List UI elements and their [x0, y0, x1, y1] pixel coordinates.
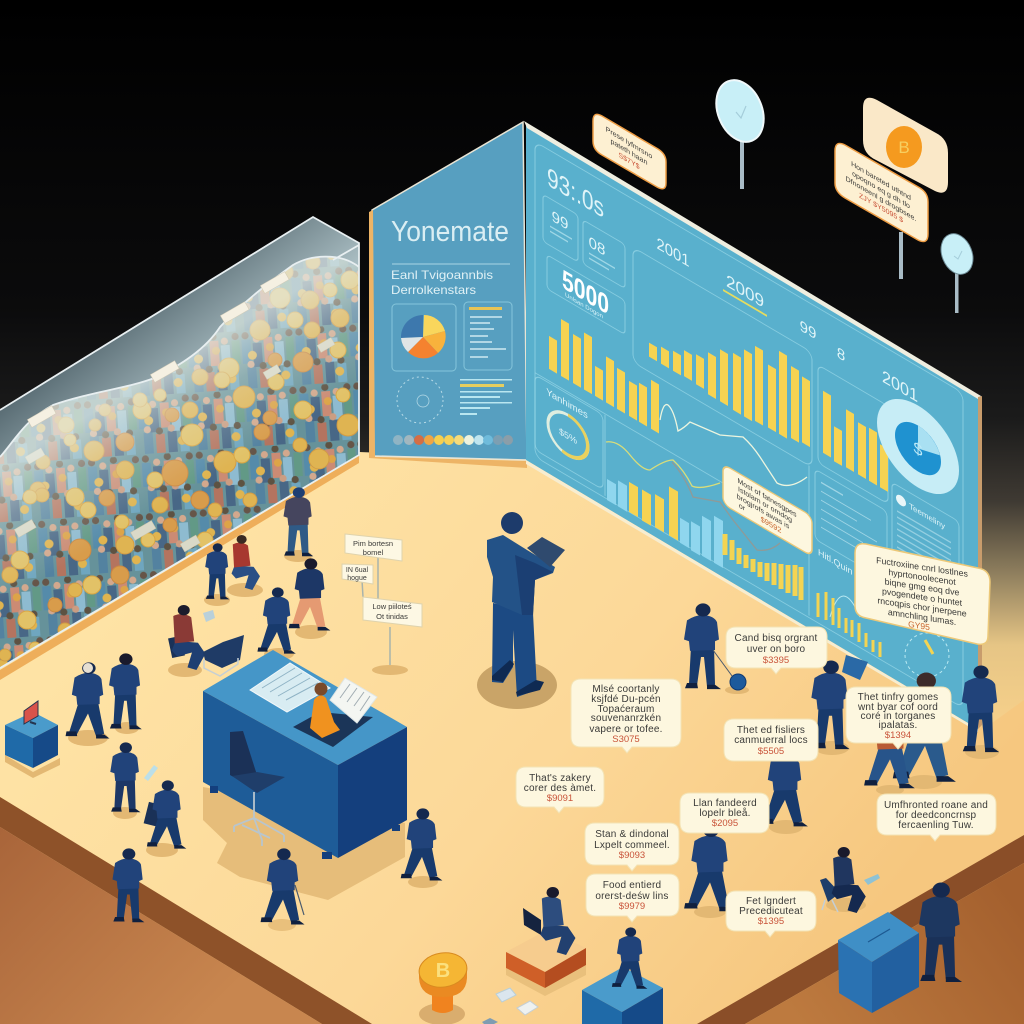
panel face: [372, 122, 527, 460]
floating note two: Hon bareted uthtnd: [851, 159, 911, 202]
glass case: crowd with coins: [0, 217, 359, 680]
bar chart three: [823, 391, 888, 493]
line chart panel frame: [535, 305, 809, 616]
person: woman on phone: [289, 558, 330, 639]
floating note one: S$7Y$: [618, 150, 640, 172]
person: holding board: [811, 655, 868, 755]
panel right bars frame: [818, 365, 888, 504]
desk feet: [210, 786, 400, 859]
glass outline: [0, 217, 359, 668]
token face: [417, 950, 469, 990]
coins: [0, 255, 359, 661]
floating note one: [593, 114, 666, 189]
dashboard skewed content: [535, 142, 963, 710]
info panel: Teemeliny: [909, 501, 946, 532]
donut panel: Yanhimes: [546, 387, 588, 421]
speech: zakery: corer des àmet.: [524, 783, 596, 794]
speech: tinfry: [846, 687, 951, 749]
year label 2001 right: 2001: [882, 366, 918, 406]
list card: [464, 302, 512, 370]
document left: [250, 663, 330, 712]
foreground people left: [112, 808, 442, 931]
cube shadow: [5, 755, 60, 778]
panel title: Yonemate: [391, 216, 509, 248]
speech: fandeerd: [680, 793, 769, 833]
person: suited by box: [919, 883, 962, 982]
speech: food: orerst-deśw lins: [595, 891, 669, 902]
speech: dindonal: $9093: [619, 850, 645, 861]
person: carrying case: [144, 780, 186, 857]
speech: fisliers: canmuerral locs: [734, 735, 808, 746]
speech: fandeerd: lopelr bleå.: [699, 807, 751, 819]
floating note two: [835, 143, 928, 279]
dark mat: [293, 712, 373, 747]
colour swatches: [393, 435, 513, 445]
stat card 08: [583, 220, 625, 289]
floating note one: pateth haan: [611, 136, 647, 167]
box slot: [868, 929, 890, 942]
stat card 99: [543, 194, 578, 262]
speech: zakery: $9091: [547, 793, 573, 804]
cube left side: [5, 725, 33, 768]
token symbol: B: [436, 960, 450, 982]
wall top edge: [524, 121, 981, 399]
blue platform with person: [582, 927, 663, 1024]
person: with tablet: [110, 742, 158, 819]
wall callout: lower note: or: [739, 501, 746, 513]
ground shadow: [477, 661, 557, 709]
speech: fandeerd: Llan fandeerd: [693, 798, 757, 809]
orange platform with laptop person: [506, 887, 586, 996]
speech: food: $9979: [619, 901, 645, 912]
dashed dial lower right: [905, 633, 949, 677]
donut panel: [535, 375, 603, 490]
bitcoin token on pedestal: [417, 950, 469, 1024]
sign one: bomel: [363, 548, 384, 557]
speech: fisliers: $5505: [758, 746, 784, 757]
box right face: [872, 933, 919, 1013]
glass back: [0, 217, 359, 668]
thin bar chart with arc: [818, 592, 880, 657]
sign three: Ot tinidas: [376, 612, 408, 621]
person: with cane: [261, 848, 305, 931]
chart panel 2001: [633, 247, 812, 467]
desk chair: [230, 731, 285, 846]
wall callout: large note: amnchling lumas.: [888, 607, 956, 627]
speech: zakery: [516, 767, 604, 813]
signpost poles: [362, 555, 390, 665]
bar chart one: [549, 312, 659, 433]
list panel: [815, 469, 887, 598]
person: seated woman with tablet: [820, 847, 880, 913]
speech: dindonal: Lxpelt commeel.: [594, 840, 670, 851]
wave tags: [27, 272, 289, 427]
platform left: [506, 952, 545, 988]
speech: coontanly: Topaćeraum: [597, 704, 655, 715]
label 99: 99: [800, 317, 816, 344]
wall callout: large note: rncoqpis chor jnerpene: [877, 595, 967, 619]
side and floor trim: [369, 210, 527, 468]
speech: unfhronted: Umfhronted roane and: [884, 800, 988, 811]
speech: fet lgndert: [726, 891, 816, 937]
panel subtitle: Derrolkenstars: [391, 283, 476, 297]
speech: unfhronted: for deedconcrnsp: [896, 810, 976, 821]
left lower ground: [0, 827, 322, 1024]
right side people: [684, 603, 999, 982]
small papers: [482, 988, 538, 1024]
platform right: [622, 988, 663, 1024]
speech: coontanly: souvenanrzkén: [591, 713, 661, 724]
sign three: [363, 597, 422, 627]
glass base strip: [0, 456, 359, 680]
platform shadow: [506, 965, 586, 996]
floor surface: [0, 452, 1024, 1024]
floating note one: Prese lyfmrsno: [606, 125, 652, 161]
person: standing plaid shirt: [284, 487, 313, 562]
panel subtitle: Eanl Tvigoannbis: [391, 268, 493, 282]
wall callout: lower note: Most of fatnesgpes: [737, 476, 797, 519]
speech: dindonal: Stan & dindonal: [595, 829, 669, 840]
wall callout: large note: Fuctroxiine cnrl lostlnes: [876, 555, 968, 579]
speech: zakery: That's zakery: [529, 773, 591, 784]
wall callout: lower note: $9592: [761, 515, 782, 535]
person: crouching red shirt: [227, 535, 263, 597]
speech: tinfry: wnt byar cof oord: [857, 702, 938, 713]
speech: food: Food entierd: [603, 880, 661, 891]
wall callout: large note: biqne gmg eoq dve: [885, 576, 959, 598]
seated orange figure: [310, 682, 340, 738]
right wall dashboard: [524, 121, 990, 732]
clock readout: 93:.0s: [547, 162, 604, 224]
speech: cond orgrant: Cand bisq orgrant: [735, 633, 817, 644]
right platform edge: [697, 835, 1024, 1024]
speech: coontanly: ksjfdé Du-pcén: [591, 694, 661, 705]
donut panel: $5%: [559, 426, 577, 447]
list panel: Hitl.Quin: [818, 547, 852, 578]
box top: [838, 912, 919, 962]
person: woman standing: [109, 653, 142, 734]
pedestal shadow: [419, 1003, 465, 1024]
stat card 5000: Unlsan Dogon: [565, 292, 603, 321]
sign one: Pim bortesn: [353, 539, 393, 548]
speech: cond orgrant: uver on boro: [747, 644, 806, 655]
left wall panel: Yonemate: [369, 122, 527, 468]
floating note two: ZJY $Y5095 $: [859, 191, 904, 225]
dotted dial: [397, 377, 443, 423]
speech: unfhronted: fercaenling Tuw.: [898, 820, 974, 831]
speech: tinfry: $1394: [885, 730, 911, 741]
cube right side: [33, 725, 58, 768]
glass haze along wave: [0, 257, 359, 668]
platform right: [545, 948, 586, 988]
speech: coontanly: [571, 679, 681, 753]
line chart curves: [606, 405, 807, 550]
sign one: [345, 534, 402, 561]
pedestal stem: [432, 992, 453, 1013]
desk shadow: [203, 787, 405, 900]
wall callout: large note: GY95: [908, 619, 930, 632]
people group behind desk: [66, 487, 330, 857]
wall callout: large note: hyprtonoolecenot: [888, 567, 956, 587]
large dollar dial: $: [914, 437, 923, 461]
bar chart two: [649, 275, 810, 455]
pie chart card: [392, 304, 456, 371]
speech: tinfry: Thet tinfry gomes: [858, 692, 938, 703]
signpost shadow: [372, 665, 408, 675]
person: jeans walking: [893, 673, 956, 789]
speech: fet lgndert: Precedicuteat: [739, 906, 803, 917]
dense yellow bars: [725, 534, 801, 600]
laptop person: [523, 887, 575, 955]
shoes: [492, 660, 544, 696]
blue storage box: [838, 912, 919, 1013]
person: phone right: [962, 665, 999, 759]
document right: [330, 678, 377, 723]
main figure with tablet: [477, 512, 565, 709]
speech: tinfry: coré in torganes: [861, 711, 935, 722]
stat card 08: 08: [589, 233, 605, 260]
person: plaid legs: [864, 700, 915, 795]
speech: fandeerd: $2095: [712, 818, 738, 829]
floor signposts: [342, 534, 422, 675]
person: standing navy: [204, 543, 230, 606]
person: with hoop: [684, 603, 749, 694]
speech: dindonal: [585, 823, 679, 871]
crowd placards: [14, 338, 335, 552]
box left face: [838, 940, 872, 1013]
tablet: [527, 537, 565, 567]
wall face: [526, 124, 978, 729]
wall callout: lower note: brogjrofs awas is: [737, 492, 789, 531]
floor platform: [0, 452, 1024, 1024]
speech: coontanly: vapere or tofee.: [589, 724, 663, 735]
round sign two: [935, 229, 979, 313]
stat card 5000: 5000: [562, 264, 609, 322]
desk right face: [338, 727, 407, 858]
label 8: 8: [837, 344, 845, 365]
legs: [492, 603, 537, 697]
small cube with monitor: [5, 701, 60, 778]
wall callout: large note: pvogendete o huntet: [882, 586, 963, 608]
person: man reading: [257, 587, 296, 660]
platform top: [582, 967, 663, 1012]
large dollar dial: [877, 381, 959, 512]
crowd tone overlay: [0, 257, 359, 668]
floating signs: [593, 73, 979, 313]
token rim: [419, 970, 467, 997]
person on platform: [612, 927, 647, 989]
person: by the ledge: [112, 848, 144, 922]
speech: coontanly: Mlsé coortanly: [592, 684, 660, 695]
speech: food: [586, 874, 679, 922]
speech: fet lgndert: Fet lgndert: [746, 896, 796, 907]
speech: tinfry: ipalatas.: [878, 720, 918, 731]
speech: coontanly: S3075: [612, 734, 640, 745]
person: large man: [66, 662, 110, 746]
speech: fisliers: [724, 719, 818, 761]
empty laptop chair: [203, 635, 244, 676]
jacket shade: [515, 555, 553, 615]
floating note two: Dfnoneenl g drogbsee.: [846, 174, 916, 223]
right lower ground: [745, 863, 1024, 1024]
platform top: [506, 930, 586, 972]
cube top: [5, 712, 58, 738]
crowd texture: [0, 257, 359, 668]
wall callout: lower note: [723, 464, 812, 556]
horizontal bar list: [460, 379, 512, 415]
sign two: IN 6ual: [346, 567, 369, 574]
bitcoin card: [863, 98, 948, 193]
round sign one: [708, 73, 772, 189]
speech: unfhronted: [877, 794, 996, 841]
outer frame: [535, 142, 963, 708]
floor speech bubbles: [516, 627, 996, 937]
large desk: [203, 650, 407, 859]
speech: fet lgndert: $1395: [758, 916, 784, 927]
sign three: Low piiloteś: [372, 602, 412, 611]
jacket: [487, 535, 555, 615]
desk top: [203, 650, 407, 765]
wall side edge: [978, 396, 982, 729]
wall callout: lower note: Istolam or omdog: [738, 484, 792, 524]
year label 2001: 2001: [657, 233, 690, 271]
stat card 5000: [547, 255, 625, 335]
info panel: [892, 482, 959, 632]
person: talking: [684, 823, 735, 918]
wall base trim: [526, 460, 978, 732]
year label 2009: 2009: [726, 270, 764, 312]
speech: cond orgrant: [726, 627, 827, 674]
floating note two: opoqno eq g dh tlo: [852, 169, 910, 211]
person: right of desk: [401, 808, 442, 888]
desk left face: [203, 691, 338, 858]
bitcoin card: B: [898, 138, 910, 157]
platform left: [582, 990, 622, 1024]
left platform edge: [0, 797, 372, 1024]
wall callout: large note: [855, 544, 990, 644]
stat card 99: 99: [552, 208, 568, 234]
monitor: [24, 701, 38, 724]
person: walking behind note: [761, 745, 808, 834]
speech: cond orgrant: $3395: [763, 655, 789, 666]
head: [501, 512, 523, 534]
sign two: [342, 564, 373, 584]
sign two: hogue: [347, 575, 367, 582]
person: seated plaid with tablet: [168, 605, 215, 677]
bar chart four: [607, 450, 723, 569]
speech: fisliers: Thet ed fisliers: [737, 725, 805, 736]
